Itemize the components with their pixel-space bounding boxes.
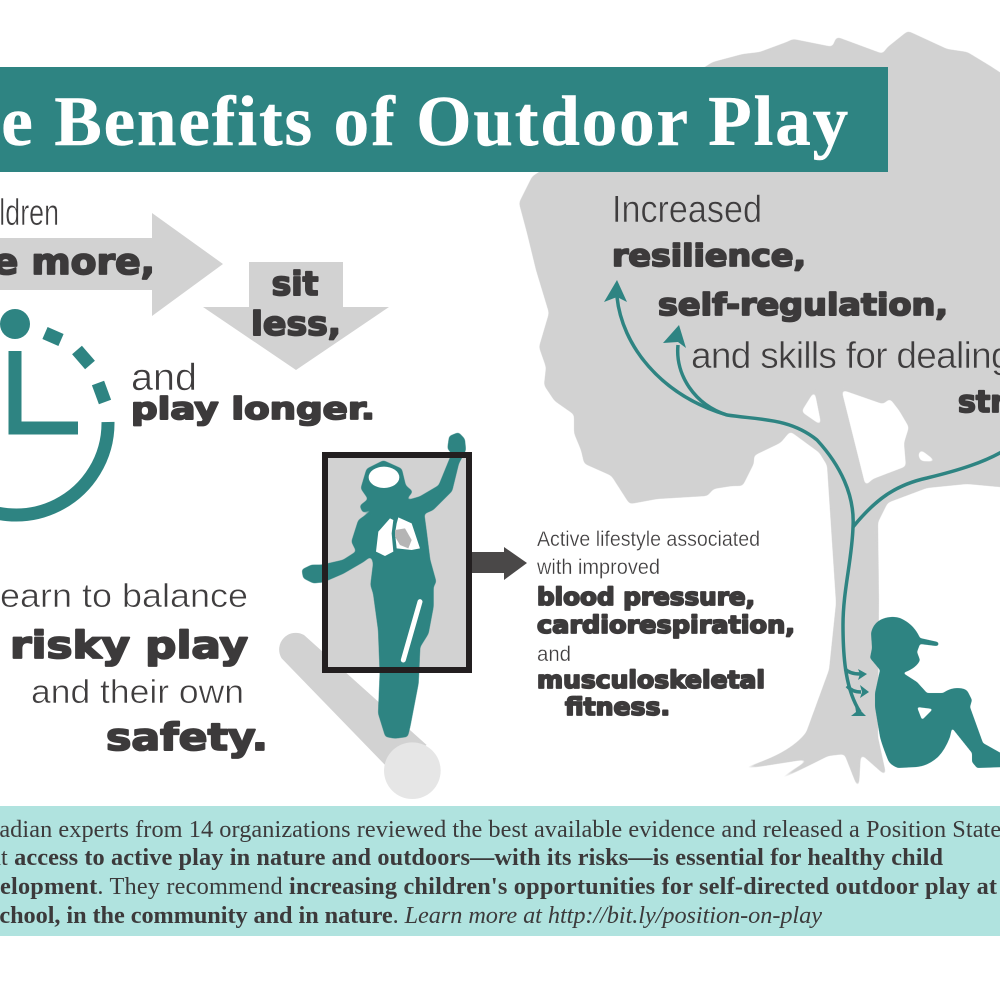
- arrow: move more: [0, 213, 223, 316]
- text: resilience: Increased: [612, 189, 762, 231]
- text: active lifestyle: fitness.: [565, 693, 670, 721]
- frame: [325, 455, 469, 670]
- text: active lifestyle: and: [537, 643, 571, 666]
- frame background: [325, 455, 469, 670]
- arrow: sit less: [203, 262, 389, 370]
- text: active lifestyle: musculoskeletal: [537, 666, 765, 694]
- arrow: to health benefits: [472, 547, 527, 580]
- text: sit less: sit: [272, 264, 319, 303]
- text: risky play: [0, 577, 268, 759]
- text: risky play: safety.: [106, 716, 268, 759]
- text: risky play: risky play: [10, 624, 248, 667]
- brain: [369, 467, 399, 488]
- text: children move more: [0, 192, 155, 283]
- arrows in tree: [604, 280, 1000, 716]
- footer text: that access to active play in nature and outdoors—with its risks—is essential for healthy child: [0, 844, 943, 871]
- text: resilience: [612, 189, 1000, 420]
- boy sitting: [870, 617, 1000, 768]
- text: active lifestyle: cardiorespiration,: [537, 611, 795, 639]
- bone: [403, 602, 420, 660]
- heart: [395, 528, 412, 548]
- footer text: school, in the community and in nature. Learn more at http://bit.ly/position-on-play: [0, 902, 822, 929]
- footer text: [0, 816, 1000, 929]
- text: sit less: less,: [251, 304, 341, 343]
- text: active lifestyle: blood pressure,: [537, 583, 755, 611]
- text: active lifestyle: Active lifestyle associated: [537, 528, 760, 551]
- lungs: [376, 517, 420, 556]
- icon: clock: [0, 309, 108, 515]
- text: and play longer: and: [131, 357, 197, 399]
- footer band: [0, 806, 1000, 936]
- child figure balancing: [303, 433, 465, 738]
- text: risky play: and their own: [31, 673, 244, 710]
- text: active lifestyle: with improved: [536, 556, 660, 579]
- log: [279, 633, 441, 799]
- text: sit less: [251, 264, 341, 343]
- text: and play longer: play longer.: [131, 392, 375, 427]
- text: resilience: resilience,: [612, 239, 806, 274]
- title banner: [0, 67, 888, 172]
- text: resilience: self-regulation,: [658, 288, 948, 323]
- tree silhouette: [520, 32, 1000, 786]
- text: active lifestyle: [536, 528, 795, 721]
- text: and play longer: [131, 357, 375, 427]
